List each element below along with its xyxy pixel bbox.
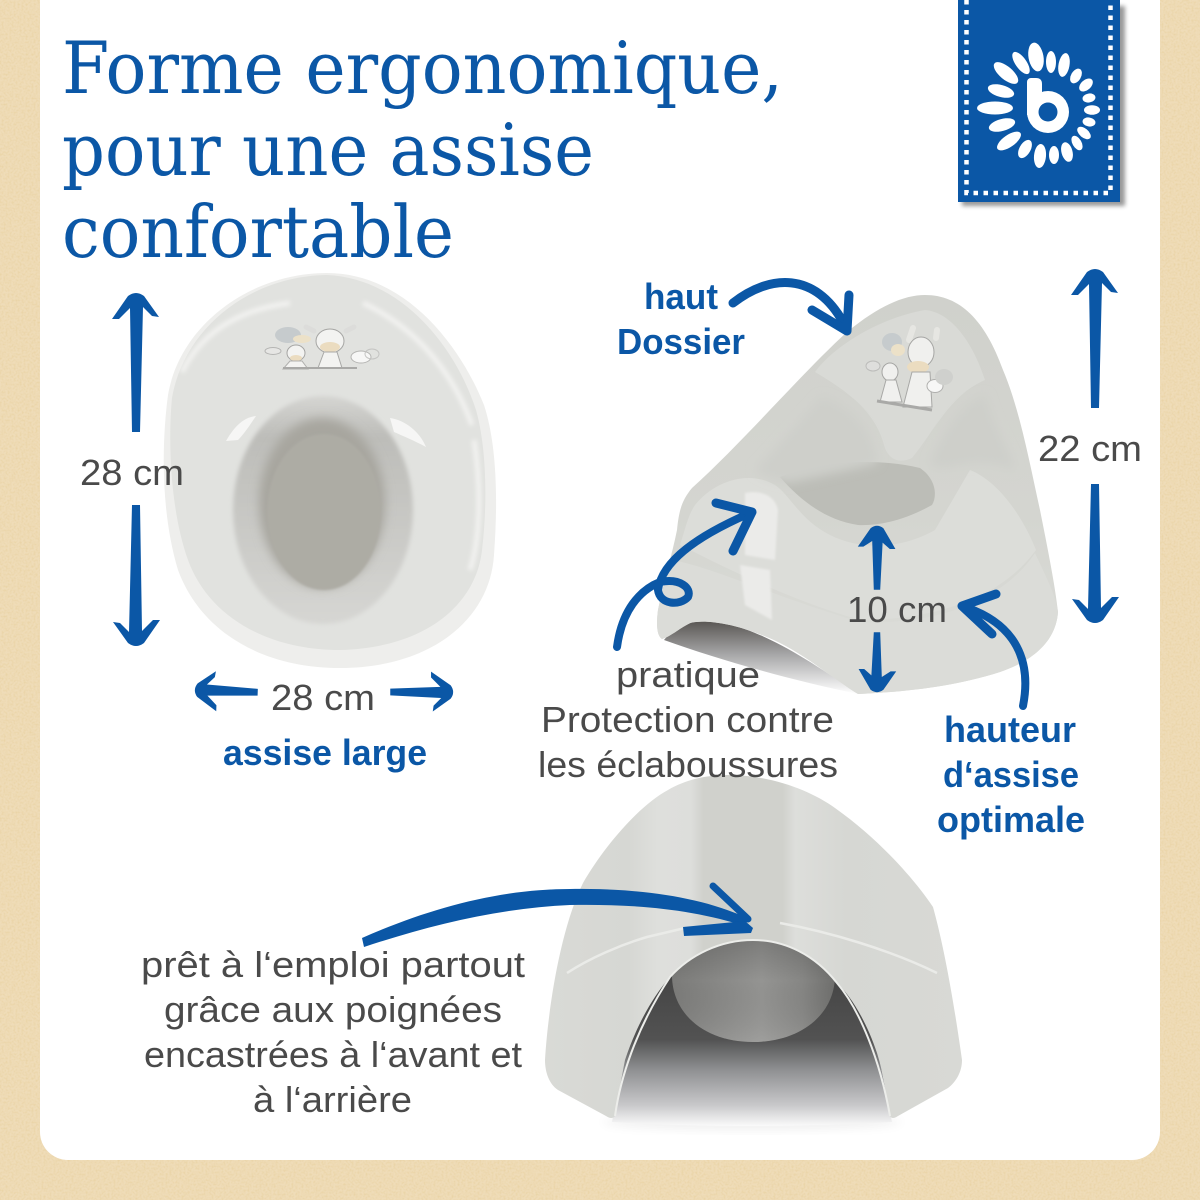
dimension arrow: 28 cm height	[112, 293, 160, 646]
potty side view: seat opening	[780, 462, 935, 525]
label: 28 cm height: 28 cm	[80, 452, 184, 493]
text: ready to use anywhere: prêt à l‘emploi partout	[141, 944, 525, 985]
label: haut Dossier: haut	[644, 276, 718, 317]
potty bottom view: inner bowl	[672, 930, 835, 1042]
potty side view: grip highlight	[740, 492, 778, 620]
dimension arrow: 10 cm	[858, 526, 896, 692]
potty top view: outer rim	[164, 273, 496, 668]
dimension arrow: 28 cm width	[194, 670, 453, 713]
potty top view: seat surface	[170, 275, 485, 650]
title: confortable	[62, 190, 454, 274]
potty top view: bowl base	[267, 434, 381, 590]
text: ready to use anywhere	[141, 944, 525, 1120]
arrow: carry handles	[362, 886, 753, 947]
label: 28 cm width: 28 cm	[271, 677, 375, 718]
logo badge	[958, 0, 1125, 206]
potty bottom view: ground shadow	[602, 1114, 902, 1130]
label: hauteur d'assise optimale: optimale	[937, 799, 1085, 840]
text: pratique Protection contre les éclaboussures: Protection contre	[541, 699, 834, 740]
potty bottom view: ledge line	[567, 923, 937, 973]
label: 10 cm: 10 cm	[847, 589, 947, 630]
potty top view: zebra print	[265, 327, 379, 369]
potty bottom view: shell	[545, 775, 962, 1118]
potty side view: shadow under arch	[664, 621, 858, 694]
label: haut Dossier: Dossier	[617, 321, 745, 362]
potty top view: highlights	[226, 416, 426, 447]
text: ready to use anywhere: encastrées à l‘avant et	[144, 1034, 522, 1075]
potty side view: seat front	[680, 470, 1036, 620]
title	[62, 26, 783, 274]
potty top view: bowl depth	[259, 418, 385, 588]
potty side view: backrest highlight	[815, 310, 985, 461]
arrow: splash guard with loop	[617, 503, 752, 647]
potty side view: zebra print	[866, 328, 953, 410]
arrow: backrest	[733, 283, 849, 331]
arrow: seat height	[962, 594, 1025, 706]
label: hauteur d'assise optimale	[937, 709, 1085, 840]
text: ready to use anywhere: à l‘arrière	[253, 1079, 412, 1120]
potty top view: seat sheen	[182, 303, 479, 570]
potty side view: lower band	[657, 553, 1058, 694]
potty top view	[164, 273, 496, 668]
title: pour une assise	[62, 108, 594, 192]
potty side view	[657, 295, 1058, 694]
label: hauteur d'assise optimale: d‘assise	[943, 754, 1079, 795]
potty bottom view: dark interior	[612, 930, 892, 1126]
text: pratique Protection contre les éclaboussures	[538, 654, 838, 785]
potty bottom view: arch rim	[615, 940, 890, 1116]
potty top view: bowl	[233, 396, 413, 624]
dimension arrow: 22 cm	[1071, 269, 1119, 623]
label: hauteur d'assise optimale: hauteur	[944, 709, 1076, 750]
title: Forme ergonomique,	[62, 26, 783, 110]
potty side view: backrest recess	[755, 395, 1015, 483]
text: pratique Protection contre les éclaboussures: les éclaboussures	[538, 744, 838, 785]
text: ready to use anywhere: grâce aux poignées	[164, 989, 502, 1030]
label: haut Dossier	[617, 276, 745, 362]
potty bottom view	[545, 775, 962, 1130]
label: 22 cm: 22 cm	[1038, 428, 1142, 469]
heading: assise large: assise large	[223, 732, 427, 773]
text: pratique Protection contre les éclaboussures: pratique	[616, 654, 760, 695]
potty side view: body	[657, 295, 1058, 694]
